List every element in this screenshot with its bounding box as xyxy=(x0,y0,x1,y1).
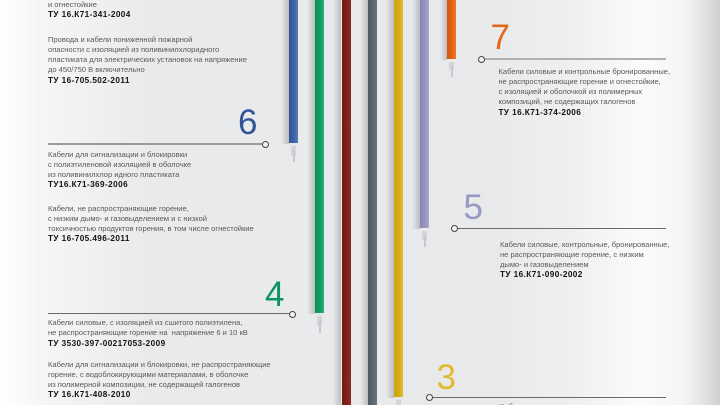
text block: top left fragment: и огнестойкие xyxy=(48,0,97,9)
text block: top left fragment: ТУ 16.К71-341-2004 xyxy=(48,10,131,19)
text block: XLPE power cables: ТУ 3530-397-00217053-2009 xyxy=(48,338,166,348)
marker 4 xyxy=(288,310,296,318)
leader line 5 xyxy=(455,228,666,229)
cable: blue xyxy=(282,0,298,162)
text block: signalling cables: с полиэтиленовой изоляцией в оболочке xyxy=(48,160,191,169)
text block: low smoke cables: Кабели, не распространяющие горение, xyxy=(48,204,189,212)
cable: purple xyxy=(414,0,429,247)
number 7: 7 xyxy=(490,18,510,56)
marker 5 xyxy=(450,225,458,232)
text block: armoured halogen free: композиций, не содержащих галогенов xyxy=(498,97,635,106)
text block: signalling cables: из поливинилхлор идного пластиката xyxy=(48,170,179,179)
marker 3 xyxy=(426,394,432,401)
number 6: 6 xyxy=(238,103,257,142)
text block: signalling cables xyxy=(48,150,191,189)
text block: water blocking cables xyxy=(48,360,271,399)
text block: armoured low smoke: Кабели силовые, контрольные, бронированные, xyxy=(500,240,669,248)
text block: XLPE power cables: Кабели силовые, с изоляцией из сшитого полиэтилена, xyxy=(48,318,242,327)
text block: signalling cables: ТУ16.К71-369-2006 xyxy=(48,180,128,189)
text block: armoured halogen free: с изоляцией и оболочкой из полимерных xyxy=(498,87,642,96)
text block: XLPE power cables xyxy=(48,318,248,348)
cable: slate xyxy=(362,0,377,405)
number 5: 5 xyxy=(464,188,483,226)
text block: XLPE power cables: не распространяющие горение на напряжение 6 и 10 кВ xyxy=(48,328,248,337)
text block: armoured low smoke: не распространяющие горение, с низким xyxy=(500,250,644,259)
cable: yellow xyxy=(388,0,403,405)
text block: armoured halogen free: Кабели силовые и контрольные бронированные, xyxy=(498,66,670,76)
text block: armoured halogen free: ТУ 16.К71-374-2006 xyxy=(498,108,581,116)
text block: water blocking cables: горение, с водоблокирующими материалами, в оболочке xyxy=(48,370,248,379)
cable: red xyxy=(334,0,351,405)
text block: low smoke cables: токсичностью продуктов горения, в том числе огнестойкие xyxy=(48,224,254,233)
marker 7 xyxy=(478,56,485,63)
text block: water blocking cables: ТУ 16.К71-408-2010 xyxy=(48,390,131,399)
leader line 7 xyxy=(483,58,666,60)
text block: fire hazard cables: до 450/750 В включительно xyxy=(48,65,145,74)
text block: water blocking cables: из полимерной композиции, не содержащей галогенов xyxy=(48,380,240,389)
text block: fire hazard cables: ТУ 16-705.502-2011 xyxy=(48,76,130,84)
text block: armoured low smoke xyxy=(500,240,669,279)
text block: armoured halogen free xyxy=(498,66,670,116)
text block: fire hazard cables xyxy=(48,34,247,84)
text block: armoured low smoke: ТУ 16.К71-090-2002 xyxy=(500,270,583,279)
text block: armoured halogen free: не распространяющие горение и огнестойкие, xyxy=(498,77,661,86)
text block: top left fragment xyxy=(48,0,131,19)
text block: fire hazard cables: Провода и кабели пониженной пожарной xyxy=(48,34,192,44)
leader line 4 xyxy=(48,313,289,314)
cable: orange xyxy=(442,0,456,77)
cable: green xyxy=(308,0,324,333)
text block: fire hazard cables: опасности с изоляцией из поливинилхлоридного xyxy=(48,45,219,54)
leader line 6 xyxy=(48,143,262,145)
marker 6 xyxy=(262,141,268,148)
text block: low smoke cables: с низким дымо- и газовыделением и с низкой xyxy=(48,214,207,223)
text block: signalling cables: Кабели для сигнализации и блокировки xyxy=(48,150,187,158)
text block: low smoke cables xyxy=(48,204,254,243)
number 3: 3 xyxy=(436,358,456,396)
text block: armoured low smoke: дымо- и газовыделением xyxy=(500,260,589,269)
number 4: 4 xyxy=(265,275,284,314)
leader line 3 xyxy=(430,397,666,398)
text block: low smoke cables: ТУ 16-705.496-2011 xyxy=(48,234,130,243)
text block: water blocking cables: Кабели для сигнализации и блокировки, не распространяющие xyxy=(48,360,271,368)
text block: fire hazard cables: пластиката для электрических установок на напряжение xyxy=(48,55,247,64)
